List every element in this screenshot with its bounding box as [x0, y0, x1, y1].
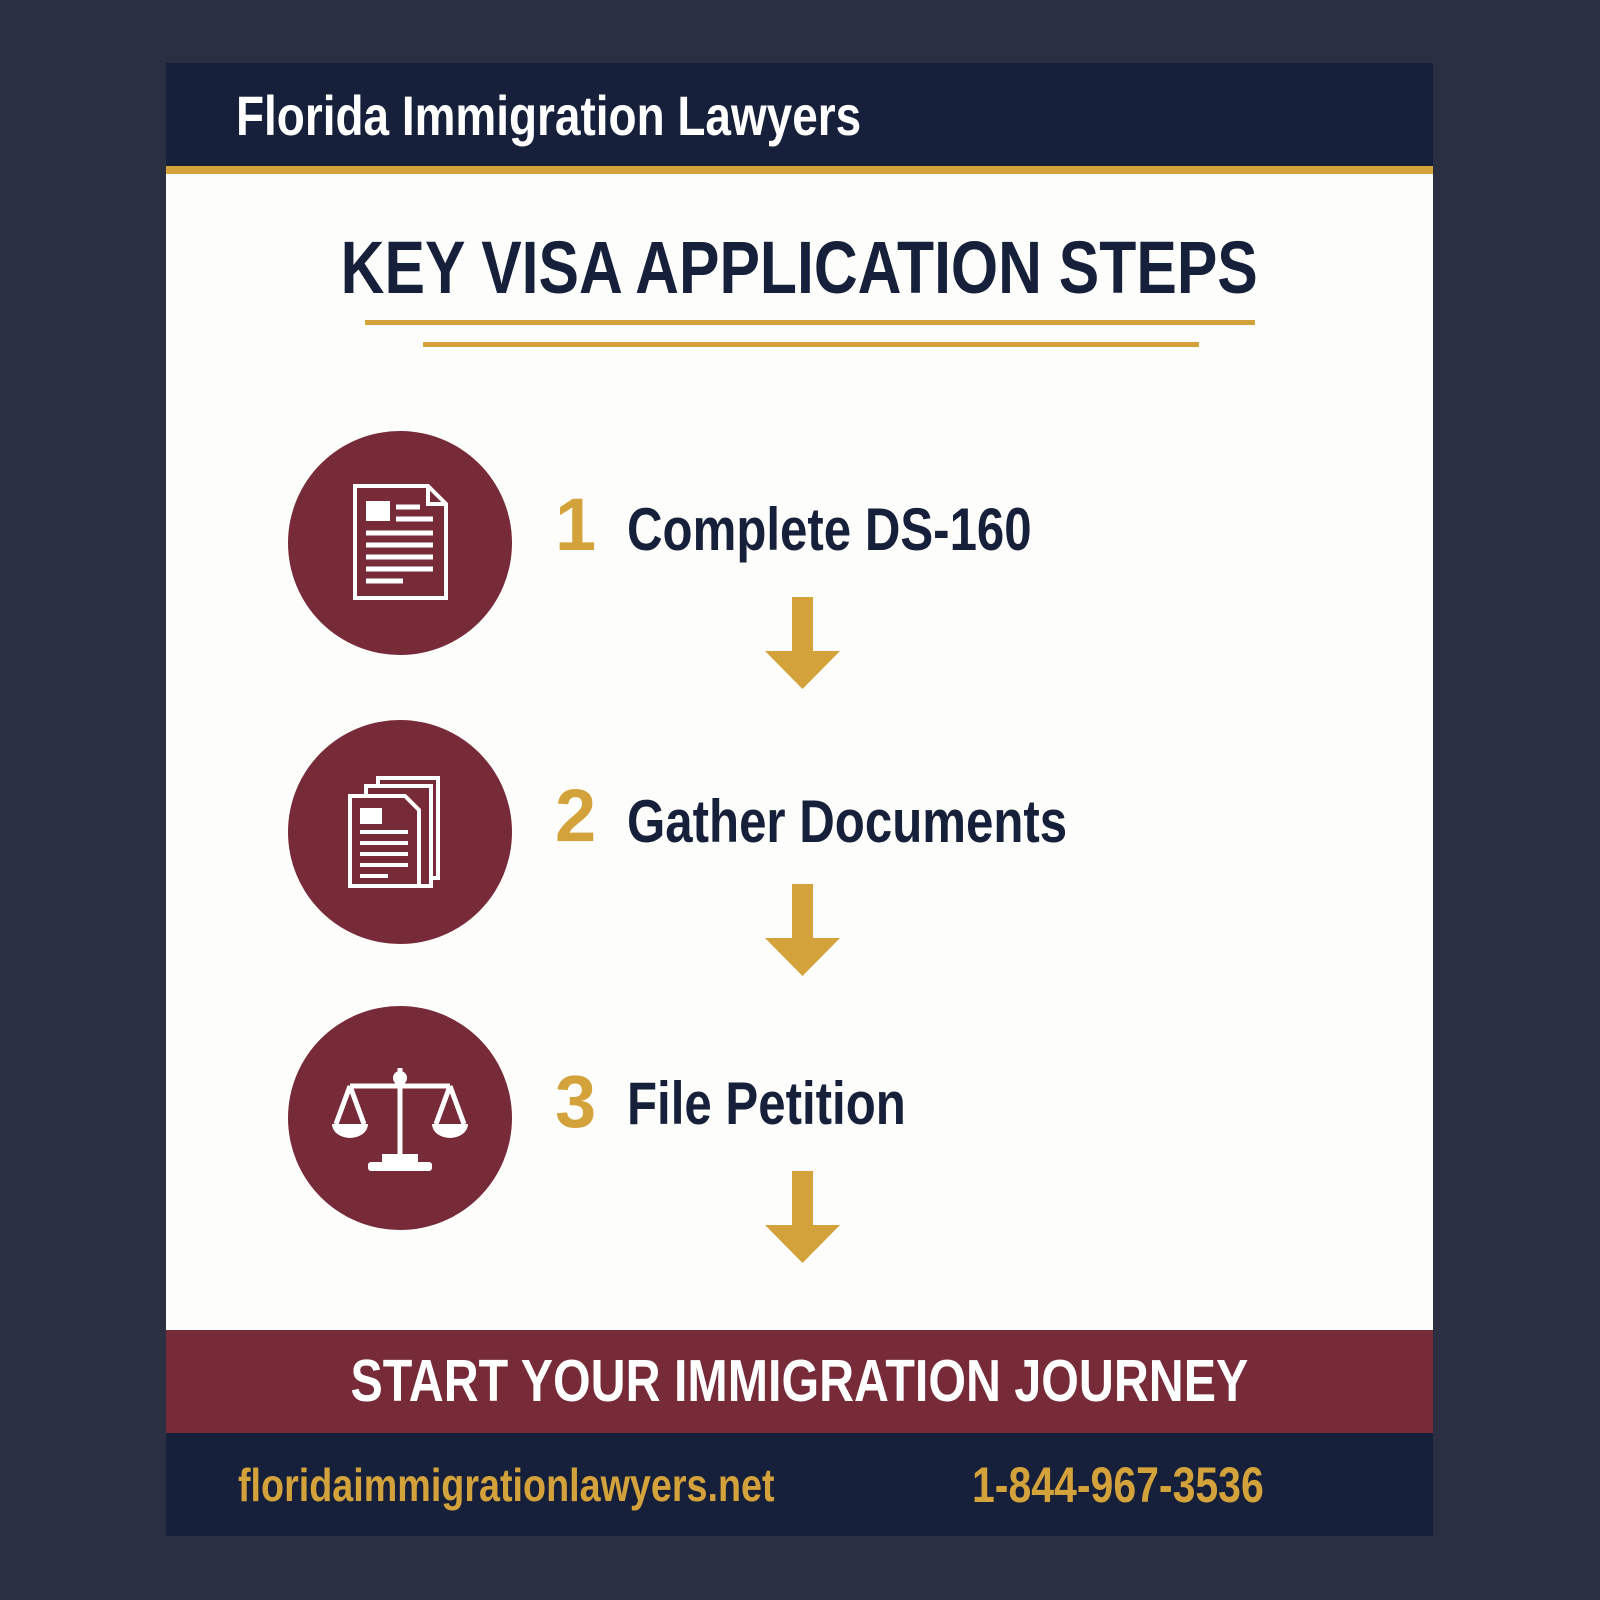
card	[166, 63, 1433, 1536]
call to action band: START YOUR IMMIGRATION JOURNEY	[351, 1348, 1248, 1414]
footer	[166, 1433, 1433, 1536]
call to action band	[166, 1330, 1433, 1433]
step 1 label: Complete DS-160	[627, 496, 1032, 563]
step 2 label: Gather Documents	[627, 788, 1067, 855]
arrow 3	[765, 1171, 840, 1263]
step 2	[288, 720, 512, 944]
header bar	[166, 63, 1433, 166]
arrow 1	[765, 597, 840, 689]
website: floridaimmigrationlawyers.net	[238, 1459, 775, 1511]
arrow 2	[765, 884, 840, 976]
icon: document	[288, 431, 512, 655]
step 1	[288, 431, 512, 655]
header text: Florida Immigration Lawyers	[236, 84, 861, 147]
number 1: 1	[555, 483, 596, 566]
icon: scales	[288, 1006, 512, 1230]
phone: 1-844-967-3536	[972, 1457, 1264, 1513]
number 2: 2	[555, 774, 596, 857]
title: KEY VISA APPLICATION STEPS	[341, 226, 1258, 309]
number 3: 3	[555, 1060, 596, 1143]
step 3	[288, 1006, 512, 1230]
icon: documents	[288, 720, 512, 944]
step 3 label: File Petition	[627, 1070, 906, 1137]
